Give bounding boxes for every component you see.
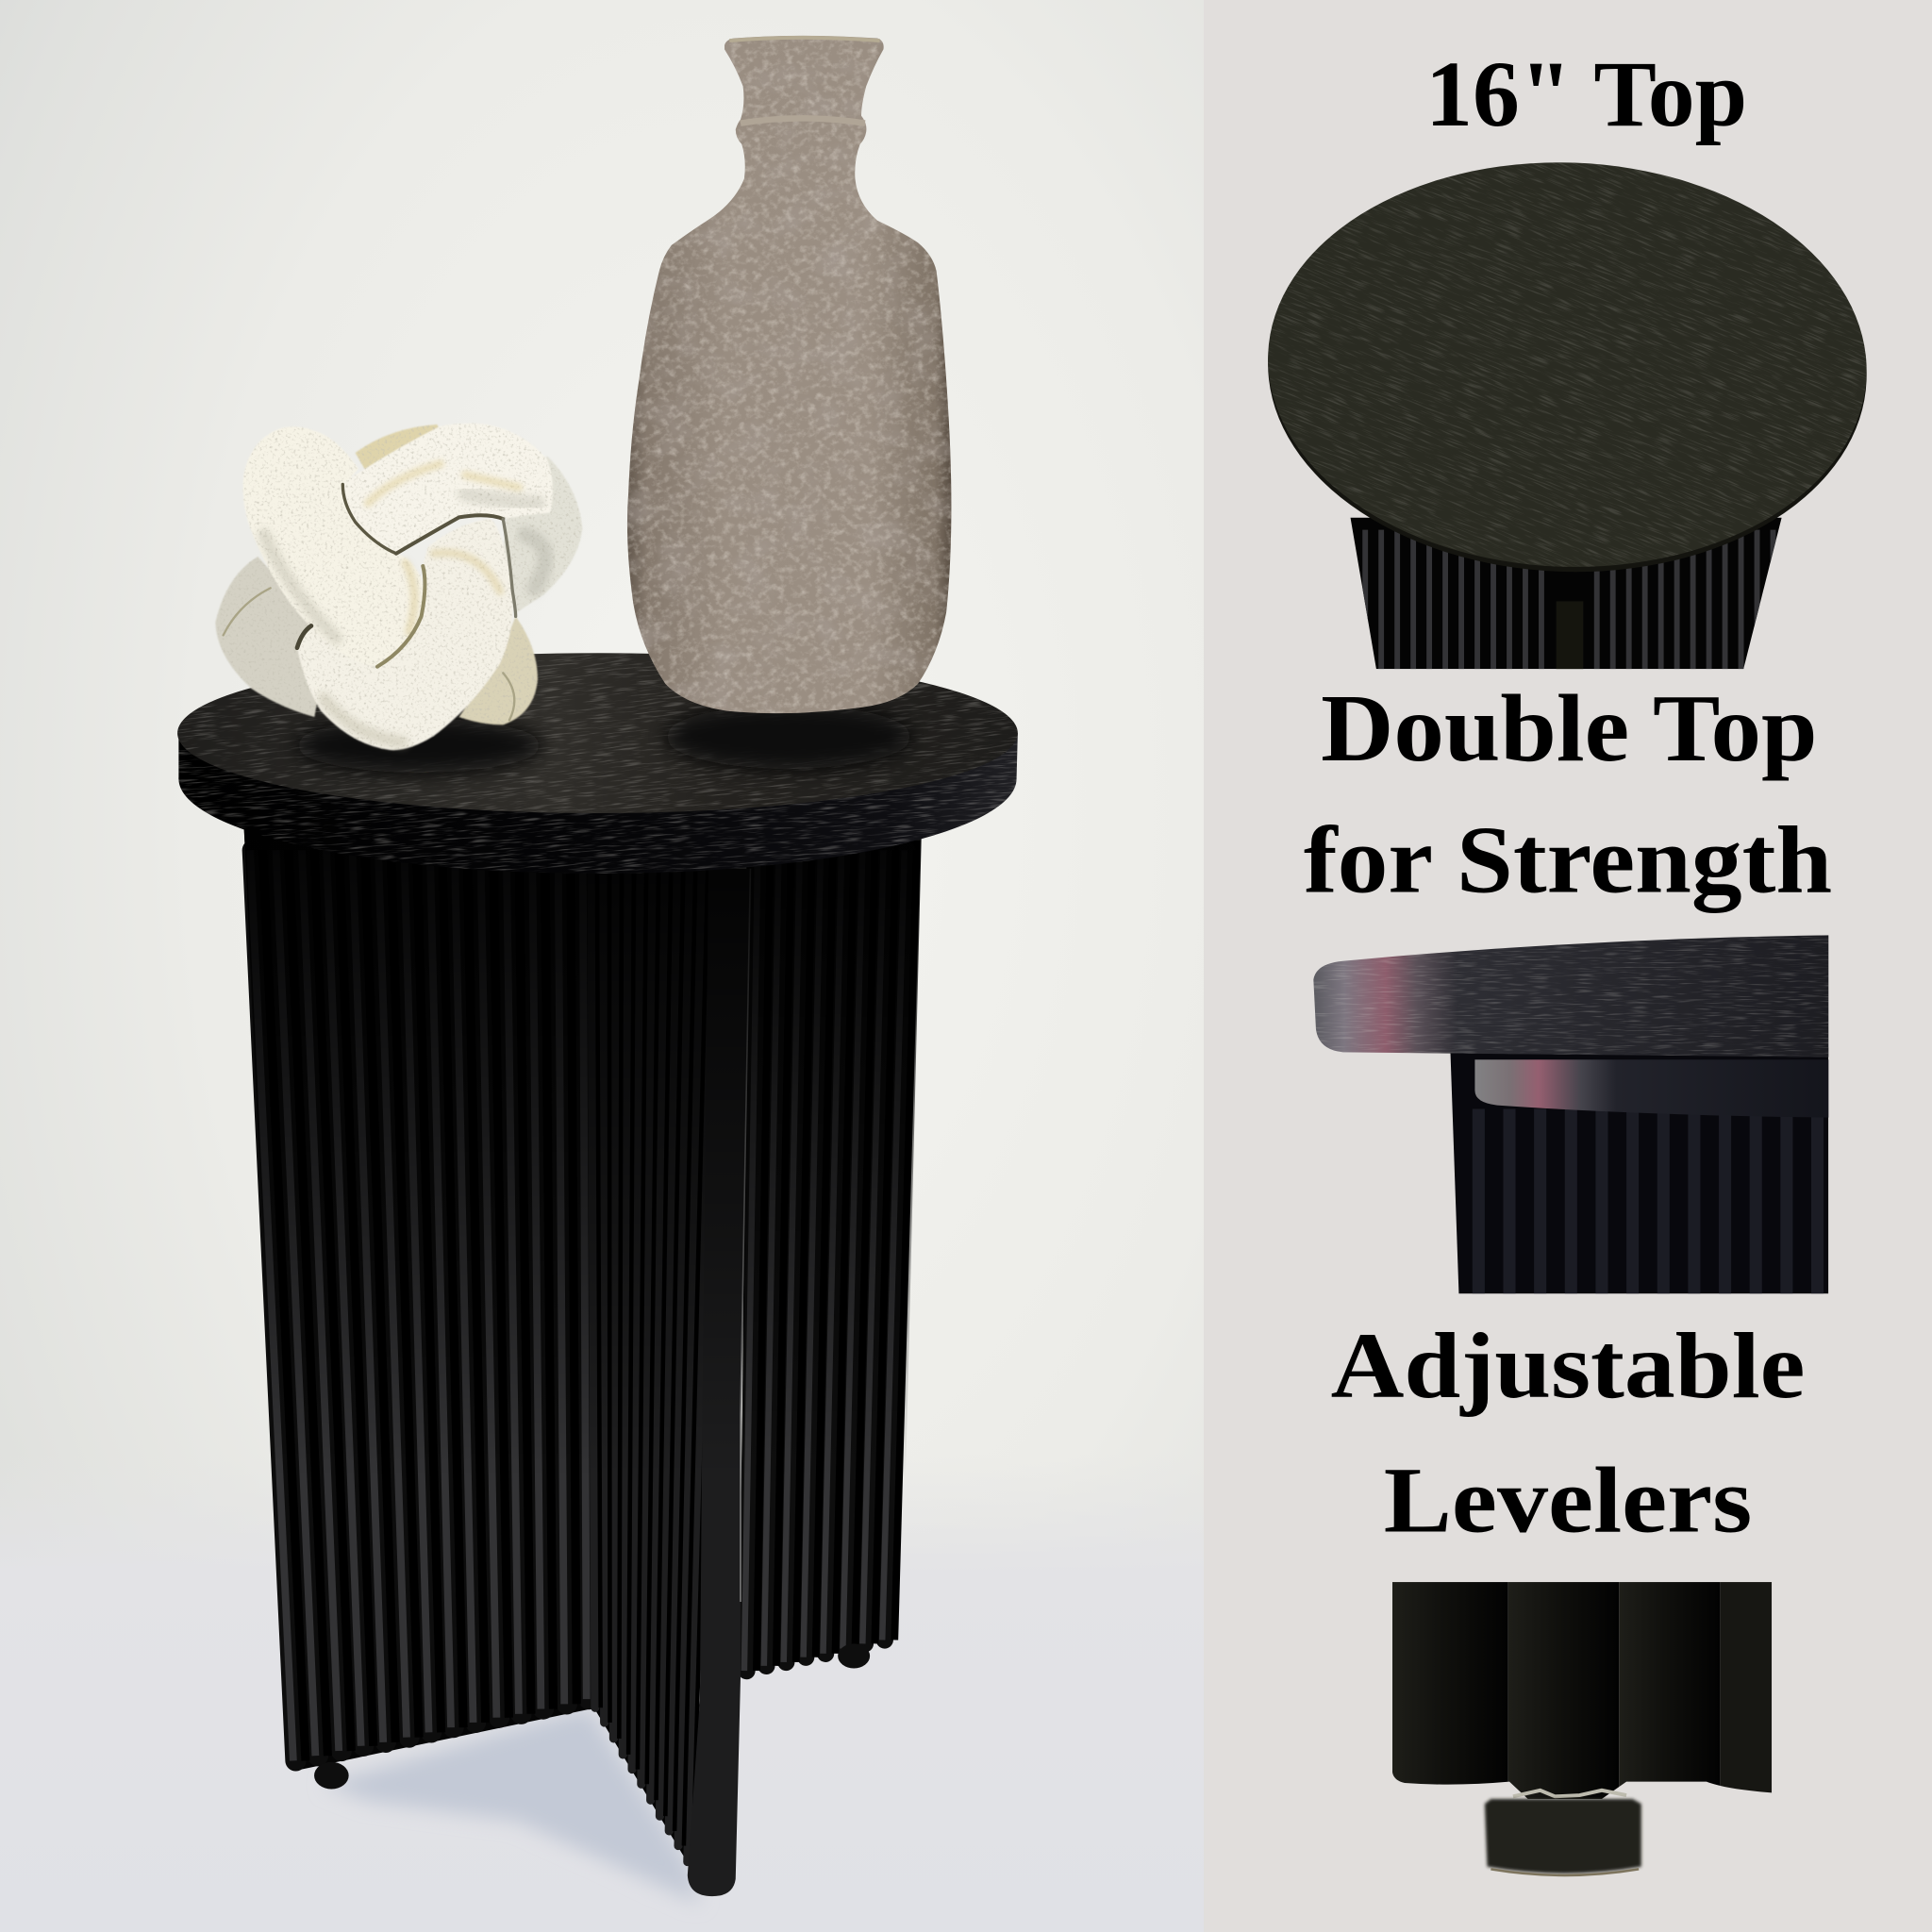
table top	[177, 653, 1018, 874]
knot crease lines	[224, 484, 516, 720]
table centre fluted panel	[587, 862, 721, 1867]
panel: product photo	[0, 0, 1204, 1932]
icon: ceramic vase	[627, 36, 951, 713]
icon: white rope knot	[215, 424, 582, 750]
table right fluted panel	[741, 841, 921, 1674]
image: table top view	[1268, 162, 1867, 670]
panel: feature column	[1268, 63, 1867, 1877]
heading: 16 inch top: 16" Top	[1425, 43, 1747, 146]
table feet	[314, 1643, 870, 1789]
heading: adjustable: Adjustable	[1331, 1315, 1805, 1418]
icon: side table	[177, 653, 1018, 1896]
heading: double top: Double Top	[1321, 675, 1818, 782]
leg shade at top	[244, 828, 922, 1478]
knot shading	[264, 464, 545, 742]
heading: for strength: for Strength	[1304, 808, 1832, 914]
heading: levelers: Levelers	[1384, 1450, 1752, 1553]
image: double top edge	[1313, 935, 1828, 1293]
image: adjustable leveler foot	[1392, 1582, 1772, 1875]
floor shadow	[323, 1707, 700, 1904]
table front blade	[688, 869, 752, 1896]
objects' shadows on table top	[665, 705, 912, 769]
table left fluted panel	[244, 828, 599, 1771]
knot strands	[215, 424, 582, 750]
